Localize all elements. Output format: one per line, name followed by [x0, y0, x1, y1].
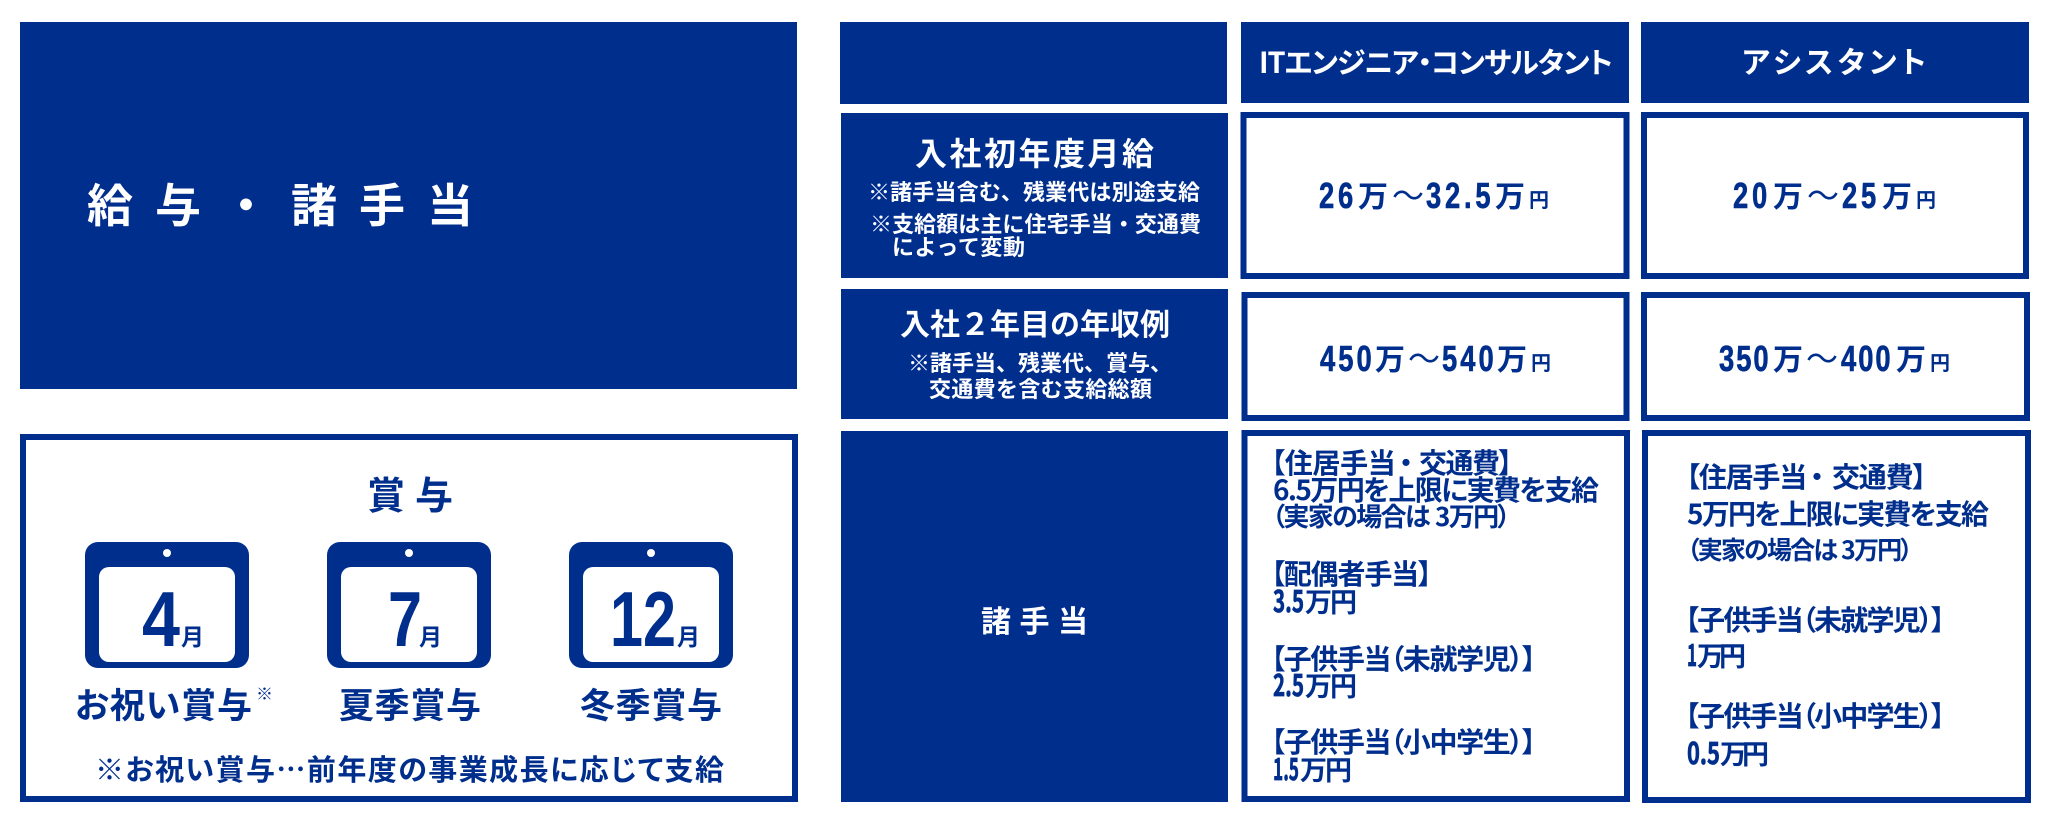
row heading: first-year monthly salary: ※支給額は主に住宅手当・交通費 — [870, 207, 1201, 239]
cell: IT allowances: 【子供手当（未就学児）】 — [1271, 638, 1536, 678]
cell: IT second-year income — [1244, 295, 1626, 418]
cell: assistant first-year salary: 円 — [1916, 184, 1936, 213]
icon: calendar July: 7 — [388, 575, 422, 663]
cell: IT second-year income: 万 — [1497, 335, 1527, 379]
cell: IT allowances: 【住居手当 — [1271, 442, 1396, 482]
cell: assistant allowances: ・ — [1810, 456, 1823, 496]
icon: calendar December — [569, 542, 733, 668]
row heading: allowances — [841, 431, 1228, 802]
cell: assistant allowances: 5万円を上限に実費を支給 — [1687, 493, 1989, 533]
amount: 2.5 — [1273, 661, 1357, 705]
header: IT engineer and consultant — [1241, 22, 1629, 103]
label: asterisk mark: ※ — [256, 680, 273, 705]
cell: IT second-year income: ～ — [1408, 334, 1440, 380]
cell: IT second-year income: 450 — [1320, 338, 1375, 379]
cell: IT allowances: 交通費】 — [1419, 442, 1511, 482]
amount: 3.5: 万円 — [1305, 581, 1357, 620]
row heading: first-year monthly salary: 入社初年度月給 — [915, 129, 1154, 175]
cell: assistant second-year income — [1644, 295, 2027, 418]
label: winter bonus: 冬季賞与 — [580, 678, 722, 729]
amount: 0.5 — [1687, 729, 1769, 773]
cell: assistant second-year income: 350 — [1719, 338, 1771, 379]
row heading: second-year annual income: 入社２年目の年収例 — [900, 300, 1170, 344]
header: assistant: アシスタント — [1742, 38, 1926, 82]
cell: IT second-year income: 万 — [1375, 335, 1405, 379]
cell: assistant second-year income: 円 — [1930, 347, 1950, 376]
row heading: first-year monthly salary: によって変動 — [892, 230, 1025, 262]
amount: 2.5: 2.5 — [1273, 661, 1304, 705]
amount: 0.5: 0.5 — [1687, 729, 1720, 773]
row heading: first-year monthly salary — [841, 113, 1228, 278]
amount: 2.5: 万円 — [1305, 665, 1357, 704]
icon: calendar December: 12 — [610, 575, 676, 663]
amount: 1: 万円 — [1697, 635, 1746, 674]
cell: IT allowances: 【子供手当（小中学生）】 — [1271, 721, 1536, 761]
cell: IT first-year salary: 万 — [1495, 172, 1525, 216]
amount: 1.5: 万円 — [1300, 749, 1352, 788]
icon: calendar April: 月 — [181, 618, 204, 652]
cell: IT first-year salary — [1244, 115, 1626, 276]
cell: assistant first-year salary: 25 — [1842, 175, 1880, 216]
amount: 0.5: 万円 — [1720, 733, 1769, 772]
amount: 1: 1 — [1687, 631, 1697, 675]
cell: IT allowances: 6.5万円を上限に実費を支給 — [1273, 469, 1599, 509]
amount: 1.5: 1.5 — [1273, 745, 1299, 789]
cell: assistant second-year income: ～ — [1806, 334, 1838, 380]
cell: assistant allowances: 【住居手当 — [1686, 456, 1806, 496]
cell: IT first-year salary: ～ — [1392, 171, 1424, 217]
cell: assistant second-year income: 万 — [1896, 335, 1926, 379]
cell: IT allowances: （実家の場合は — [1272, 497, 1431, 534]
cell: assistant first-year salary: 万 — [1882, 172, 1912, 216]
label: celebration bonus: お祝い賞与 — [75, 678, 252, 729]
title: 給与・諸手当 — [87, 170, 473, 236]
cell: assistant first-year salary — [1644, 115, 2026, 276]
cell: IT allowances: ・ — [1399, 442, 1413, 482]
panel: page title — [20, 22, 797, 389]
row heading: second-year annual income — [841, 289, 1228, 419]
cell: assistant second-year income: 400 — [1841, 338, 1893, 379]
cell: IT allowances: 【配偶者手当】 — [1271, 553, 1432, 593]
cell: assistant first-year salary: ～ — [1807, 171, 1839, 217]
panel: bonus — [23, 437, 795, 799]
cell: assistant allowances: 交通費】 — [1832, 456, 1925, 496]
icon: calendar July: 月 — [419, 618, 442, 652]
icon: calendar July — [327, 542, 491, 668]
panel: table header blank — [840, 22, 1227, 104]
label: summer bonus: 夏季賞与 — [339, 678, 481, 729]
header: assistant — [1641, 22, 2029, 103]
icon: calendar April — [85, 542, 249, 668]
cell: IT second-year income: 540 — [1442, 338, 1497, 379]
cell: assistant first-year salary: 万 — [1773, 172, 1803, 216]
amount: 1.5 — [1273, 745, 1352, 789]
cell: IT allowances — [1244, 433, 1627, 799]
cell: assistant allowances — [1645, 433, 2028, 800]
icon: calendar April: 4 — [142, 575, 180, 663]
cell: IT first-year salary: 32.5 — [1426, 175, 1494, 216]
cell: IT second-year income: 円 — [1531, 347, 1551, 376]
row heading: allowances: 諸手当 — [981, 597, 1088, 641]
cell: assistant allowances: 【子供手当（小中学生）】 — [1685, 695, 1945, 735]
header: IT engineer and consultant: ITエンジニア・コンサルタント — [1259, 40, 1613, 82]
cell: assistant first-year salary: 20 — [1733, 175, 1771, 216]
cell: assistant second-year income: 万 — [1773, 335, 1803, 379]
row heading: second-year annual income: 交通費を含む支給総額 — [929, 372, 1152, 404]
icon: calendar December: 月 — [677, 618, 700, 652]
cell: IT first-year salary: 円 — [1529, 184, 1549, 213]
cell: assistant allowances: 3万円） — [1841, 531, 1911, 567]
cell: assistant allowances: 【子供手当（未就学児）】 — [1685, 599, 1945, 639]
row heading: second-year annual income: ※諸手当、残業代、賞与、 — [908, 346, 1172, 378]
bonus footnote: ※お祝い賞与…前年度の事業成長に応じて支給 — [95, 747, 724, 789]
cell: IT first-year salary: 26 — [1319, 175, 1357, 216]
cell: IT allowances: 3万円） — [1435, 497, 1509, 534]
amount: 3.5 — [1273, 577, 1357, 621]
cell: IT first-year salary: 万 — [1358, 172, 1388, 216]
bonus heading: 賞与 — [367, 465, 453, 520]
cell: assistant allowances: （実家の場合は — [1687, 531, 1838, 567]
amount: 3.5: 3.5 — [1273, 577, 1304, 621]
row heading: first-year monthly salary: ※諸手当含む、残業代は別途支給 — [868, 175, 1200, 207]
